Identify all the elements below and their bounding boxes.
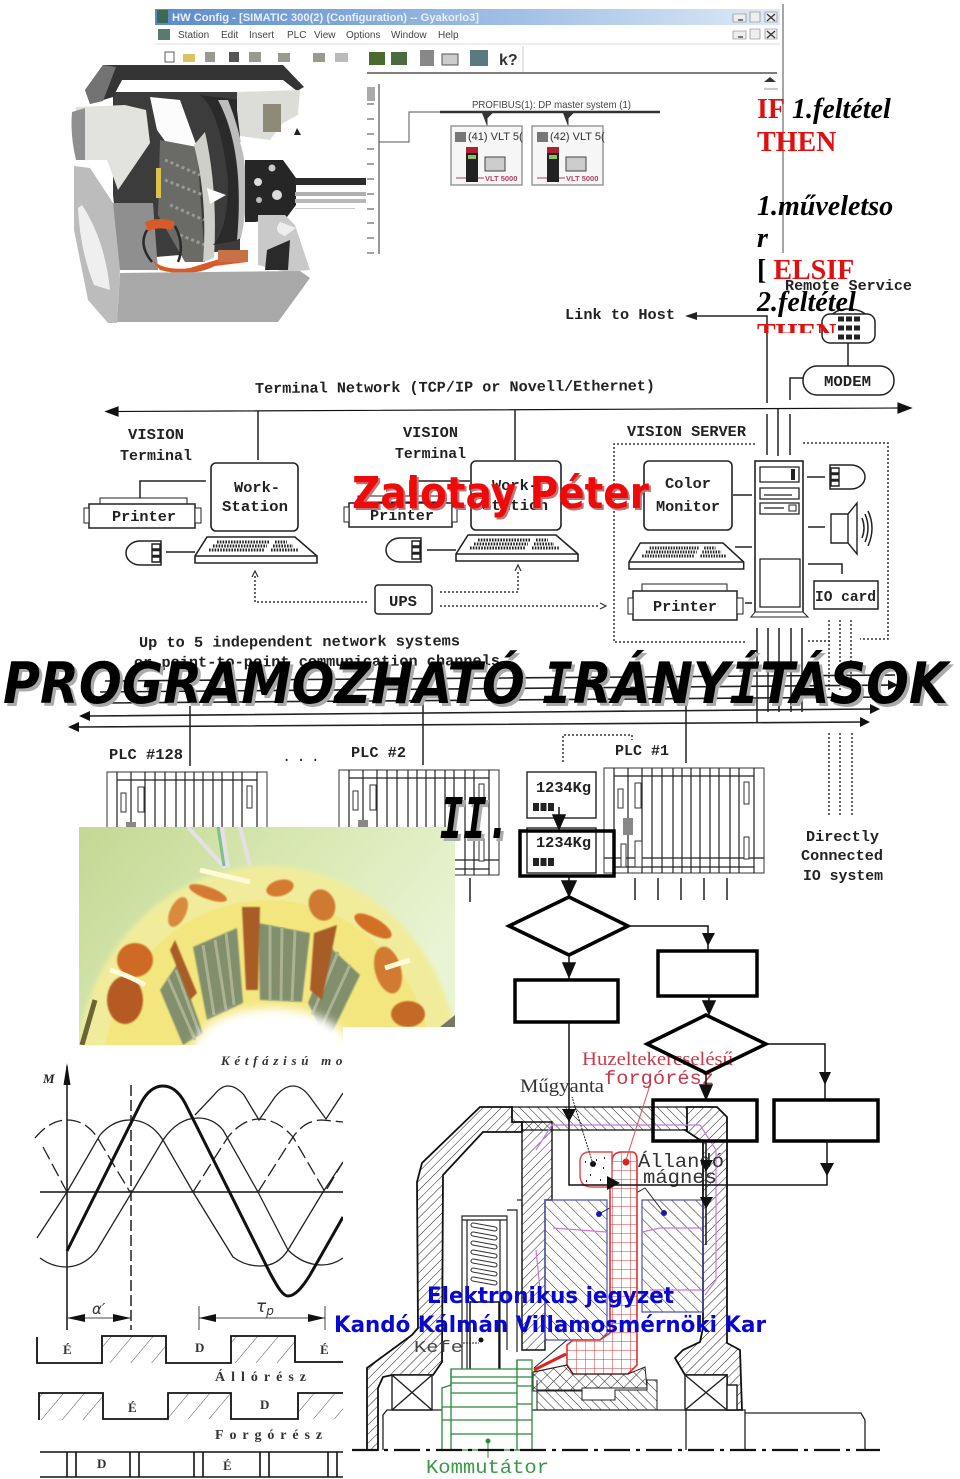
flow: merge lines xyxy=(569,1022,827,1245)
axes xyxy=(40,1063,343,1330)
motor rim xyxy=(218,100,246,240)
panel: vision server: VISION SERVER xyxy=(627,424,746,441)
block B xyxy=(515,980,618,1022)
menu bar: Options xyxy=(346,30,380,41)
author name: Zalotay Péter xyxy=(352,468,649,519)
panel: PLC units xyxy=(107,733,883,902)
dashed curves xyxy=(35,1119,343,1192)
panel: vision terminal 1: VISION xyxy=(128,427,184,444)
label wire winding: Huzeltekercselésű xyxy=(582,1050,733,1070)
code text: IF THEN ELSIF: 1.műveletso xyxy=(757,191,893,222)
panel: PLC units: 1234Kg xyxy=(536,835,591,852)
device box 42: (42) VLT 5( xyxy=(550,131,605,143)
panel: vision server xyxy=(614,409,888,723)
housing top band xyxy=(512,1107,687,1130)
flow: decision 1 down xyxy=(563,955,575,980)
panel: vision server: Monitor xyxy=(656,499,720,516)
panel: vision server: Color xyxy=(665,476,711,493)
center line xyxy=(352,1449,880,1451)
photo: stator winding xyxy=(79,827,455,1045)
motor bearing xyxy=(245,160,296,222)
label rotor: forgórész xyxy=(604,1068,714,1090)
thin curves xyxy=(37,1120,343,1266)
menu bar xyxy=(158,29,459,41)
title bar xyxy=(155,9,780,25)
chart: torque waveforms xyxy=(34,1056,343,1478)
toolbar icons xyxy=(165,50,488,66)
flow: decision 1 right xyxy=(628,926,708,950)
motor shell light edge xyxy=(85,65,116,104)
panel: vision terminal 2: Terminal xyxy=(395,446,466,463)
tau dimension: p xyxy=(265,1304,274,1318)
flow: display to decision xyxy=(553,807,576,897)
chart heading: Kétfázisú motor xyxy=(220,1053,376,1068)
subtitle: faculty: Kandó Kálmán Villamosmérnöki Kar xyxy=(334,1313,766,1338)
code text: IF THEN ELSIF: THEN xyxy=(757,127,836,158)
rotor core hatch xyxy=(533,1365,657,1410)
label kefe xyxy=(414,1338,484,1358)
code text: IF THEN ELSIF: 2.feltétel xyxy=(756,287,856,318)
panel: vision terminal 2: Work- xyxy=(492,478,538,495)
label kommutator: Kommutátor xyxy=(426,1457,549,1479)
title part II: II. xyxy=(440,787,510,852)
motor white backing xyxy=(72,65,310,323)
panel: vision terminal 1: Printer xyxy=(112,509,176,526)
motor light disc xyxy=(194,132,215,262)
housing right wall xyxy=(675,1107,742,1410)
flow: decision 2 right xyxy=(766,1044,825,1100)
motor lower cylinder xyxy=(117,271,310,322)
code text: IF THEN ELSIF: [ ELSIF xyxy=(757,255,854,286)
device box 41: (41) VLT 5( xyxy=(468,131,523,143)
menu bar: PLC xyxy=(287,30,306,41)
motor top shell xyxy=(85,65,304,104)
help icon: k? xyxy=(499,52,518,69)
motor interior dark xyxy=(113,92,250,260)
motor yellow part xyxy=(156,168,161,198)
magnets xyxy=(545,1188,703,1340)
panel: PLC units: . . . xyxy=(283,749,319,766)
rotor strip: É xyxy=(128,1400,137,1415)
label: network systems note xyxy=(134,633,500,672)
menu bar: Station xyxy=(178,30,209,41)
network diagram: top part xyxy=(106,278,912,416)
panel: vision terminal 1 xyxy=(84,411,317,565)
commutator strip: D xyxy=(97,1456,106,1471)
thin curve 2 xyxy=(40,1118,343,1267)
commutator strip xyxy=(40,1452,343,1477)
motor orange wiring xyxy=(145,219,175,232)
icon: telephone xyxy=(822,309,875,343)
motor lower right blob xyxy=(258,215,310,272)
arrow heads: merge xyxy=(562,1109,834,1209)
label permanent magnet: Állandó xyxy=(638,1151,724,1173)
panel: vision terminal 1: Station xyxy=(222,499,288,516)
motor cutaway image xyxy=(72,65,366,323)
axis label M: M xyxy=(42,1071,55,1086)
stator strip: D xyxy=(195,1340,204,1355)
panel: PLC units: Directly xyxy=(806,829,879,846)
commutator marker xyxy=(487,1441,489,1458)
window title: HW Config - [SIMATIC 300(2) (Configuration) -- Gyakorlo3] xyxy=(172,12,479,24)
modem: MODEM xyxy=(824,374,871,391)
label resin: Műgyanta xyxy=(520,1077,604,1097)
code text: IF THEN ELSIF: THEN xyxy=(757,319,836,350)
menu bar: View xyxy=(314,30,336,41)
motor circuit board xyxy=(158,140,205,262)
panel: PLC units: Connected xyxy=(801,848,883,865)
panel: vision terminal 2: Printer xyxy=(370,508,434,525)
commutator dot xyxy=(486,1438,490,1444)
commutator strip: É xyxy=(223,1458,232,1473)
housing left shell xyxy=(367,1107,522,1450)
stator label: Állórész xyxy=(215,1368,312,1385)
field buses xyxy=(68,675,898,766)
flow: decision 2 down xyxy=(700,1073,712,1100)
motor cross-section xyxy=(352,1050,880,1479)
motor shaft xyxy=(295,178,366,185)
menu bar: Help xyxy=(438,30,459,41)
flux lines xyxy=(536,1125,716,1295)
panel: vision server: Printer xyxy=(653,599,717,616)
device box 41 xyxy=(451,113,523,185)
panel: HW Config window xyxy=(155,4,783,254)
stator strip: É xyxy=(320,1342,329,1357)
motor lower left gray xyxy=(113,203,158,270)
bearings xyxy=(392,1375,737,1410)
code text: IF THEN ELSIF: r xyxy=(757,223,769,254)
upper envelope xyxy=(195,1086,343,1120)
arrow head: link to host xyxy=(685,312,697,320)
resin xyxy=(572,1097,612,1187)
motor front face xyxy=(74,166,120,323)
rotor winding xyxy=(534,1085,650,1374)
panel: vision terminal 1: Terminal xyxy=(120,448,192,465)
shaft xyxy=(383,1410,865,1450)
subtitle: electronic notes: Elektronikus jegyzet xyxy=(427,1284,674,1309)
device box 42: VLT 5000 xyxy=(566,174,598,183)
menu bar: Window xyxy=(391,30,427,41)
motor light flare xyxy=(207,188,226,204)
panel: vision terminal 2: Station xyxy=(482,498,548,515)
flowchart xyxy=(509,807,878,1245)
panel: vision terminal 2 xyxy=(344,410,578,562)
spring and brush holder xyxy=(462,1200,522,1400)
arrow head: decision 2 right xyxy=(819,1072,831,1085)
label permanent magnet: mágnes xyxy=(643,1167,717,1189)
menu bar: Insert xyxy=(249,30,274,41)
rotor strip xyxy=(39,1393,343,1420)
panel: PLC units: PLC #128 xyxy=(109,747,183,764)
alpha dimension xyxy=(67,1303,131,1322)
panel: PLC units: PLC #1 xyxy=(615,743,669,760)
modem xyxy=(790,343,894,400)
window buttons xyxy=(733,12,777,39)
commutator xyxy=(442,1360,532,1450)
stator strip: É xyxy=(63,1342,72,1357)
profibus line xyxy=(379,112,440,142)
label: network systems note: Up to 5 independent network systems xyxy=(139,633,460,652)
motor small dark mark xyxy=(294,128,301,135)
block C xyxy=(653,1100,757,1141)
panel: vision server: IO card xyxy=(815,589,876,606)
UPS with dotted power lines: UPS xyxy=(389,594,417,611)
UPS with dotted power lines xyxy=(252,565,606,614)
motor dark disc xyxy=(200,95,240,245)
motor connector xyxy=(72,105,150,190)
rotor strip: D xyxy=(260,1397,269,1412)
label: remote service: Remote Service xyxy=(785,278,912,295)
decision 2 xyxy=(647,1015,766,1073)
main title: PROGRAMOZHATÓ IRÁNYÍTÁSOK xyxy=(3,649,951,717)
arrow head right xyxy=(702,933,715,946)
rotor label: Forgórész xyxy=(215,1428,328,1443)
profibus label: PROFIBUS(1): DP master system (1) xyxy=(472,99,631,111)
device box 42 xyxy=(532,113,605,185)
panel: vision terminal 1: Work- xyxy=(234,480,280,497)
device box 41: VLT 5000 xyxy=(485,174,517,183)
panel: vision terminal 2: VISION xyxy=(403,425,458,442)
code text: IF THEN ELSIF: IF 1.feltétel xyxy=(757,94,891,125)
label: terminal network: Terminal Network (TCP/IP or Novell/Ethernet) xyxy=(255,378,655,398)
scroll strip xyxy=(367,84,379,254)
label: link to host: Link to Host xyxy=(565,307,675,324)
code text: IF THEN ELSIF xyxy=(756,94,893,350)
network bus line xyxy=(106,403,911,416)
panel: PLC units: IO system xyxy=(803,868,883,885)
inner plate xyxy=(522,1122,552,1350)
motor white wedge xyxy=(150,97,197,148)
tau dimension: τ xyxy=(256,1297,266,1317)
panel: PLC units: 1234Kg xyxy=(536,780,591,797)
flow: block A to decision 2 xyxy=(703,996,715,1015)
label permanent magnet xyxy=(638,1151,724,1189)
tau dimension xyxy=(198,1302,326,1330)
block D xyxy=(774,1100,878,1141)
menu bar: Edit xyxy=(221,30,238,41)
block A xyxy=(658,951,757,996)
motor front highlight xyxy=(78,205,110,290)
stator strip xyxy=(37,1336,343,1363)
motor upper right parts xyxy=(237,90,300,140)
label kefe: Kefe xyxy=(414,1339,463,1358)
window right edge xyxy=(782,4,784,253)
line: link to host xyxy=(690,316,767,403)
thick resulting curve xyxy=(67,1086,343,1296)
operation block xyxy=(520,831,614,876)
decision 1 xyxy=(509,897,628,955)
label: network systems note: or point-to-point communication channels xyxy=(134,653,500,672)
panel: PLC units: PLC #2 xyxy=(351,745,406,762)
alpha dimension: α′ xyxy=(92,1300,106,1318)
